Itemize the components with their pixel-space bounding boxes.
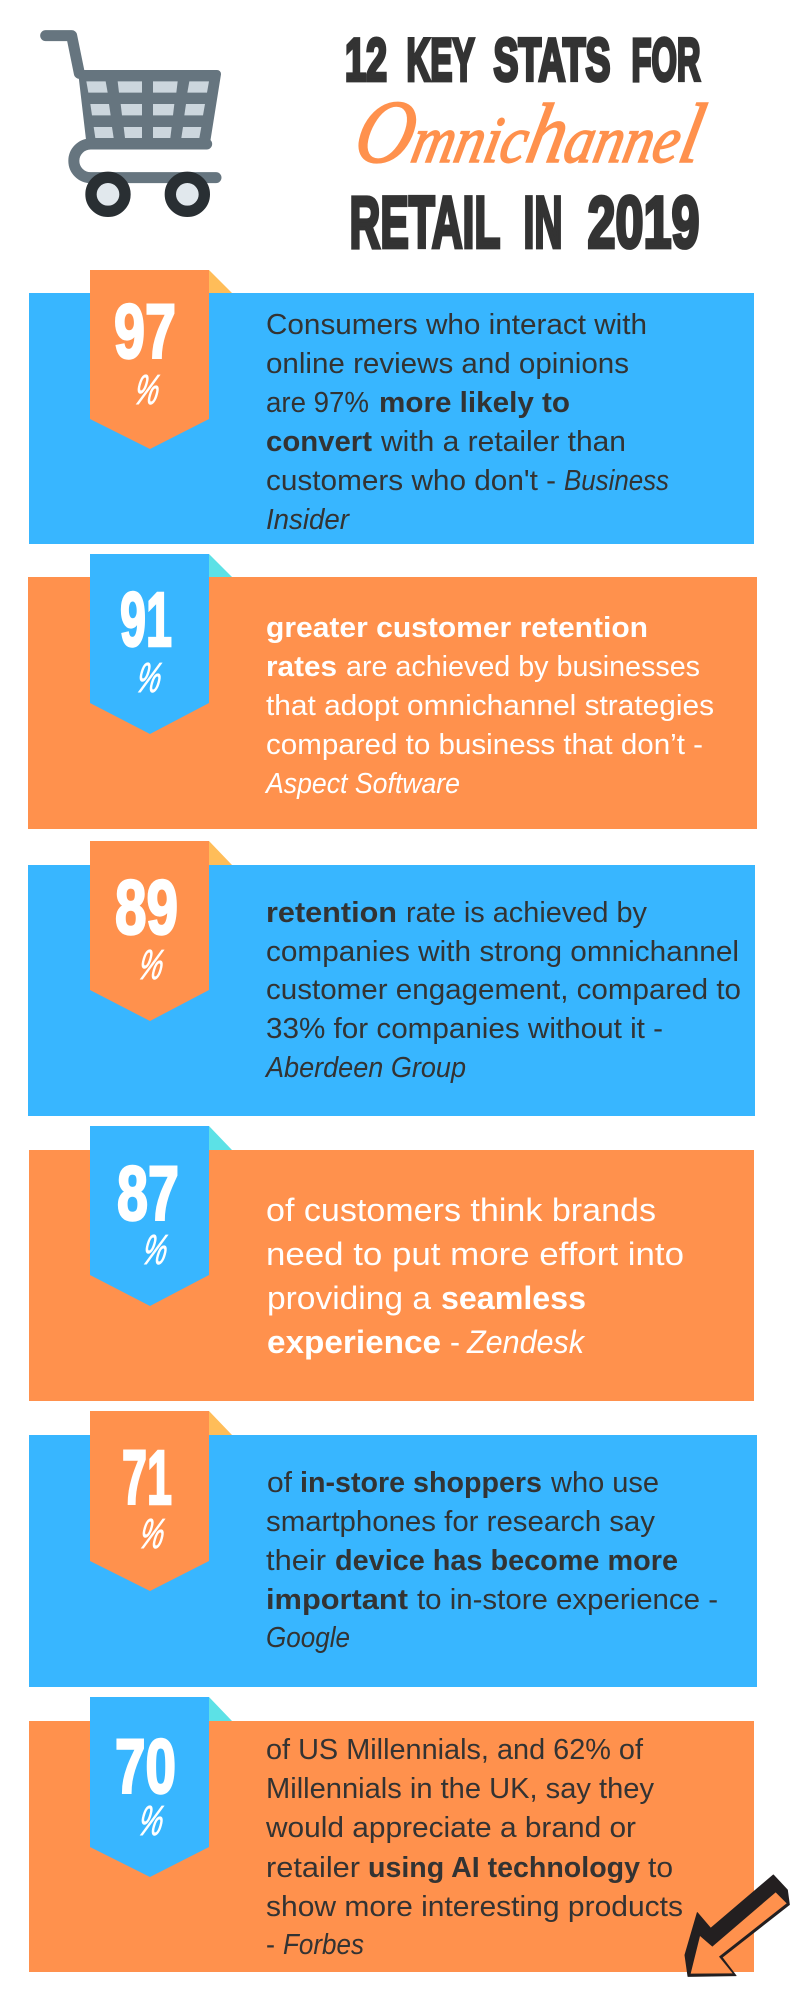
panel: 91%: 91 (120, 577, 172, 663)
text: 89% description: 33% for companies without it - (266, 1013, 663, 1045)
panel: 89% (28, 841, 755, 1116)
panel: 91%: % (133, 654, 166, 701)
text: 91% description: rates (266, 651, 337, 683)
text: 70% description: Forbes (283, 1929, 364, 1961)
text: 71% description: smartphones for research say (266, 1506, 655, 1538)
text: 70% description: show more interesting products (266, 1891, 683, 1923)
text: 87% description: experience (267, 1324, 441, 1360)
text: 89% description: companies with strong omnichannel (266, 936, 739, 968)
text: 97% description: with a retailer than (380, 426, 626, 458)
text: 87% description: need to put more effort into (266, 1236, 684, 1272)
text: 70% description: using AI technology (368, 1852, 640, 1884)
panel: 71%: % (136, 1510, 169, 1557)
panel: 87%: % (139, 1226, 172, 1273)
panel: 97%: % (131, 366, 164, 413)
text: 89% description: rate is achieved by (406, 897, 647, 929)
text: 91% description: are achieved by businesses (346, 651, 700, 683)
text: 91% description: compared to business that don’t - (266, 729, 703, 761)
panel: 89%: 89 (115, 865, 178, 951)
text: 71% description: their (266, 1545, 326, 1577)
panel: 91% (28, 554, 757, 829)
text: 89% description: Aberdeen Group (264, 1052, 466, 1084)
text: 87% description: providing a (267, 1280, 432, 1316)
panel: 71% (29, 1411, 757, 1687)
text: 71% description: who use (550, 1467, 659, 1499)
panel: 71%: 71 (122, 1435, 172, 1521)
title: RETAIL (350, 182, 500, 264)
panel: 87% (29, 1126, 754, 1401)
icon: shopping cart (46, 36, 217, 211)
title (345, 26, 714, 264)
panel: 70% (29, 1697, 754, 1972)
text: 87% description (266, 1192, 684, 1360)
panel: 97%: 97 (114, 289, 176, 375)
text: 89% description: retention (266, 897, 397, 929)
text: 70% description: to (648, 1852, 673, 1884)
panel: 87%: 87 (117, 1151, 179, 1237)
text: 97% description: are 97% (266, 387, 369, 419)
text: 91% description: greater customer retention (266, 612, 648, 644)
text: 71% description: to in-store experience - (417, 1584, 718, 1616)
text: 89% description (264, 897, 741, 1084)
text: 97% description: Business (564, 465, 669, 497)
text: 70% description: of US Millennials, and 62% of (266, 1734, 644, 1766)
text: 97% description: more likely to (379, 387, 570, 419)
text: 71% description: in-store shoppers (300, 1467, 542, 1499)
text: 70% description: - (266, 1929, 275, 1961)
text: 87% description: Zendesk (466, 1324, 586, 1360)
text: 97% description (266, 309, 669, 536)
title: FOR (632, 26, 700, 94)
arrow: pointing down-left (685, 1875, 789, 1976)
text: 91% description: that adopt omnichannel strategies (266, 690, 714, 722)
text: 71% description: device has become more (335, 1545, 678, 1577)
title: Omnichannel (347, 82, 714, 182)
text: 91% description: Aspect Software (264, 768, 460, 800)
text: 70% description: retailer (266, 1852, 360, 1884)
text: 97% description: Insider (266, 504, 350, 536)
panel: 97% (29, 270, 754, 544)
text: 97% description: online reviews and opinions (266, 348, 629, 380)
panel: 70%: 70 (115, 1724, 176, 1810)
text: 97% description: Consumers who interact with (266, 309, 647, 341)
text: 71% description: important (266, 1584, 408, 1616)
text: 97% description: convert (266, 426, 372, 458)
panel: 70%: % (135, 1797, 168, 1844)
text: 89% description: customer engagement, compared to (266, 974, 741, 1006)
text: 97% description: customers who don't - (266, 465, 556, 497)
text: 91% description (264, 612, 714, 800)
panel: 89%: % (135, 941, 168, 988)
text: 87% description: of customers think brands (266, 1192, 656, 1228)
title: STATS (494, 26, 610, 94)
text: 71% description (266, 1467, 718, 1654)
title: 12 (345, 26, 387, 94)
text: 70% description: Millennials in the UK, say they (266, 1773, 654, 1805)
title: KEY (406, 26, 474, 94)
text: 71% description: of (267, 1467, 293, 1499)
text: 70% description: would appreciate a brand or (265, 1812, 636, 1844)
text: 87% description: - (450, 1324, 460, 1360)
title: IN (524, 182, 562, 264)
text: 71% description: Google (266, 1622, 350, 1654)
title: 2019 (588, 182, 700, 264)
text: 70% description (265, 1734, 683, 1961)
text: 87% description: seamless (441, 1280, 586, 1316)
